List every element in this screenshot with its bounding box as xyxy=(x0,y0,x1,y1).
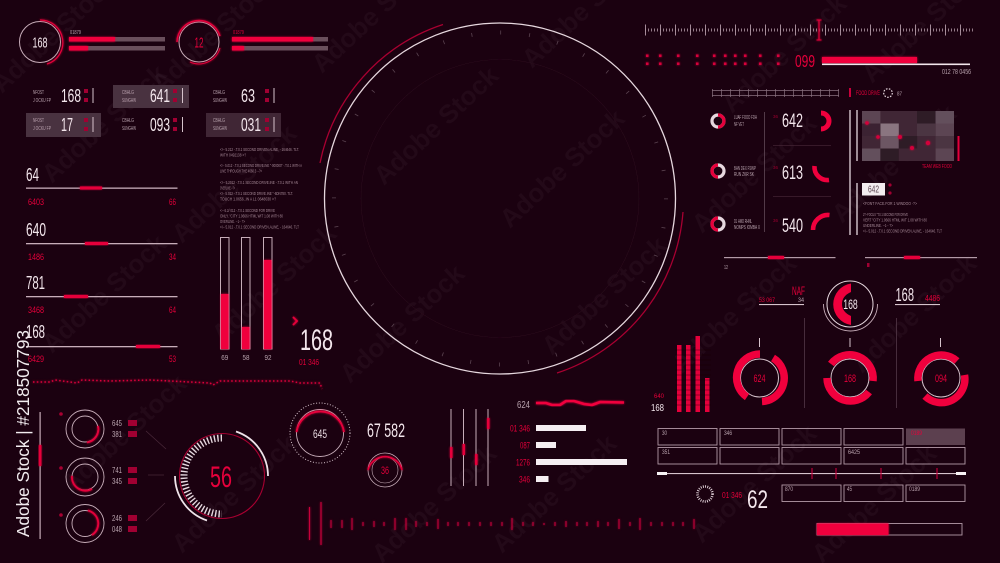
data table: 0189 xyxy=(911,431,923,437)
gauge: 36 xyxy=(368,453,402,487)
ring row 1: 381 xyxy=(112,430,122,439)
code text block: top: ONLY. "CITY 1.0666 HTML WIT 1.08 WITH 80 xyxy=(220,214,283,218)
data table: 30 xyxy=(662,431,667,437)
data table xyxy=(658,428,965,464)
stat row: 540: DJ HMD RHNL xyxy=(734,219,752,225)
stat: 093: CBHLG xyxy=(122,118,134,124)
slider: 781: 781 xyxy=(26,273,45,293)
ring row 1: 645 xyxy=(112,419,122,428)
gauge: 645: 645 xyxy=(313,427,327,441)
ring row 2 xyxy=(59,458,137,496)
stat: 63 xyxy=(213,85,274,106)
header: 168: 4486 xyxy=(925,294,940,303)
code text block: right: JT--FOCUS "T.0.1 SECOND FOR DRIVE xyxy=(863,212,908,217)
status label with spinner: FOOD DRIVE xyxy=(856,91,880,97)
stat: 031: CBHLG xyxy=(213,118,225,124)
progress bars: 01879 xyxy=(69,30,165,50)
sliders: right pair xyxy=(724,256,977,271)
watermark pattern: Adobe Stock xyxy=(206,218,343,349)
value: 099 with bar: 012 78 0456 xyxy=(942,69,971,76)
stat: 031 xyxy=(213,114,274,135)
slider: left xyxy=(724,256,836,271)
header: NAF: NAF xyxy=(792,284,805,298)
watermark pattern: Adobe Stock xyxy=(166,118,303,249)
gauge: 12: 12 xyxy=(194,34,204,52)
stat row: 540: 36 xyxy=(773,218,778,223)
stat: 168: 168 xyxy=(61,85,81,106)
value: 099 with bar xyxy=(795,51,971,76)
value: 099 with bar: 099 xyxy=(795,51,815,71)
watermark pattern: Adobe Stock xyxy=(666,248,803,379)
slider: 64 xyxy=(26,165,178,207)
stat row: 540: 540 xyxy=(782,216,803,237)
stat row: 613: 36 xyxy=(773,165,778,170)
gauge: 168 pie: 168 xyxy=(843,296,858,312)
watermark pattern: Adobe Stock xyxy=(36,58,173,189)
main circular scope xyxy=(320,23,683,374)
ring row 3: 048 xyxy=(112,525,122,534)
code text block: top: OVERLINE --?> xyxy=(220,186,235,190)
code text block: top: OVERLINE. --1-- ?> xyxy=(220,219,245,224)
code text block: right xyxy=(863,201,942,234)
slider: 640: 1486 xyxy=(28,252,44,262)
stat: 031: SUNGHW xyxy=(213,126,227,132)
level bars: 640 xyxy=(654,393,664,400)
short ticks xyxy=(760,338,940,347)
watermark pattern: Adobe Stock xyxy=(486,428,623,559)
data table: lower cells: 0189 xyxy=(909,487,921,493)
code text block: top: <!-- 5.2012 -.T.0.1 SECOND DRIVE.INE -.T.0.1 WITH AN xyxy=(220,180,298,185)
stat: 17 xyxy=(33,114,94,135)
stat row: 613: BAN DEX FSWP xyxy=(734,166,756,172)
data table: lower cells xyxy=(782,485,965,502)
divider xyxy=(763,112,766,232)
stat: 168: J OCKU FP xyxy=(33,98,51,104)
stat row: 642 xyxy=(712,111,829,132)
panel: right donut gauges xyxy=(737,281,965,408)
stat: 63: SUNGHW xyxy=(213,98,227,104)
donut: 168: 168 xyxy=(844,373,856,385)
row: 01 346: 01 346 xyxy=(510,424,530,434)
red caption: TEAM WEB FOOD xyxy=(922,164,952,170)
data table: lower cells: 870 xyxy=(785,487,794,493)
vertical rules xyxy=(850,110,857,235)
panel: right heat map xyxy=(850,110,960,235)
bar: 58: 58 xyxy=(242,353,250,362)
outer ring xyxy=(324,23,676,374)
horizontal bar chart xyxy=(510,400,627,484)
stat: 168: NFOST xyxy=(33,90,44,96)
code text block: top: <-- 6.2/ 012 -.T.0.1 SECOND FOR DRIVE xyxy=(220,208,275,213)
data table: 6425 xyxy=(848,450,861,456)
watermark pattern: Adobe Stock xyxy=(166,428,303,559)
red arc: lower right xyxy=(557,212,683,373)
panel: stat cells xyxy=(26,85,281,137)
slider: 781 xyxy=(26,273,178,315)
signal ticks: bottom centre xyxy=(310,502,694,545)
stat: 641: SUNGHW xyxy=(122,98,136,104)
code text block: right: UNDERLINE. --1-- ?> xyxy=(863,223,893,228)
slider: 64: 66 xyxy=(169,197,176,207)
ruler: secondary xyxy=(712,90,839,96)
level bars: 168 xyxy=(651,403,664,414)
value: 62 xyxy=(722,486,768,514)
header: 168 xyxy=(895,285,940,305)
vertical sliders xyxy=(450,409,490,486)
donut: 624 xyxy=(737,354,784,402)
gauge: 36: 36 xyxy=(381,465,389,477)
dotted red wave xyxy=(33,380,322,389)
code text block: top: <!-- 5.012 -.T.0.1 SECOND DRIVE.INE "-000000" -.T.0.1 WITH A xyxy=(220,163,303,168)
stat: 641: 641 xyxy=(150,85,170,106)
header: NAF xyxy=(759,284,805,305)
panel: small ring list xyxy=(59,410,166,542)
bar chart: vertical levels xyxy=(220,238,272,362)
callout: 168: 168 xyxy=(300,324,333,357)
separator xyxy=(773,195,831,198)
cell highlights xyxy=(26,85,281,137)
slider: 781: 3468 xyxy=(28,305,44,315)
table rule with markers xyxy=(657,468,966,479)
code text block: top: LINE THROUGH THE 4660.3 --?> xyxy=(220,168,262,174)
left vertical slider xyxy=(39,412,41,539)
ring row 2: 345 xyxy=(112,477,122,486)
watermark pattern: Adobe Stock xyxy=(36,228,173,359)
watermark pattern: Adobe Stock xyxy=(56,368,193,499)
gauge: 168: 168 xyxy=(32,34,48,52)
progress bars: red label: 01879 xyxy=(233,30,244,36)
stat: 641 xyxy=(122,85,183,106)
stat: 17: NFOST xyxy=(33,118,44,124)
value: 62: 62 xyxy=(747,486,768,514)
code text block: top: WITH 0492138 >? xyxy=(220,152,246,158)
tick ring xyxy=(334,32,666,364)
stat row: 613: RUN ZKR SK xyxy=(734,172,754,178)
code text block: right: <FONT FACE.FOR 1 WINDOO -?> xyxy=(863,201,917,206)
callout: 168 xyxy=(293,317,333,367)
code text block: top: <!-- 5.212 -.T.0.1 SECOND DRIVEN.ALINE, - 164646. TLT. xyxy=(220,147,299,152)
stat row: 540 xyxy=(712,215,830,237)
slider: 168: 6429 xyxy=(28,354,44,364)
row: 087: 087 xyxy=(520,440,530,450)
data table: lower cells: 45 xyxy=(847,487,852,493)
gauge: 168 pie xyxy=(824,281,878,331)
code text block: top: TOUCH 1.0656..IN A L1 0648030 >? xyxy=(220,196,276,202)
status label with spinner xyxy=(849,88,902,98)
stat row: 642: LUAF FOOD FDH xyxy=(734,115,757,121)
donut: 624: 624 xyxy=(754,373,766,385)
callout: 168: 01 346 xyxy=(299,357,319,367)
progress bars: red label xyxy=(232,30,328,50)
slider: 640: 34 xyxy=(169,252,176,262)
gauge: 56 xyxy=(175,432,268,520)
slider: 168: 168 xyxy=(26,322,45,342)
slider: 64: 6403 xyxy=(28,197,44,207)
slider: left: 12 xyxy=(724,265,728,271)
value: 67 582: 67 582 xyxy=(367,420,405,442)
stat: 63: CBHLG xyxy=(213,90,225,96)
code text block: top: <!-- 5.012 -.T.0.1 SECOND DRIVE.INE "-6DN780. TLT. xyxy=(220,191,293,196)
ruler: top right xyxy=(645,20,974,40)
donut: 094: 094 xyxy=(935,373,947,385)
progress bars: 01879: 01879 xyxy=(70,30,81,36)
progress bar: bottom right xyxy=(817,524,962,535)
panel: left sliders xyxy=(26,165,178,364)
panel: top-left gauges xyxy=(20,20,328,64)
ring row 1 xyxy=(59,410,137,448)
stat: 031: 031 xyxy=(241,114,261,135)
gauge: 12 xyxy=(177,21,220,64)
code text block: top: <!-- 5.012 -.T.0.1 SECOND DRIVEN.ALINE, - 164646. TLT xyxy=(220,224,299,230)
red dot pairs xyxy=(646,54,780,65)
stat: 641: CBHLG xyxy=(122,90,134,96)
slider: right xyxy=(865,256,977,267)
code text block: right: <!-- 5.012 -.T.0.1 SECOND DRIVEN.ALINE, - 164646. TLT xyxy=(863,228,942,234)
connector lines xyxy=(146,431,166,521)
gauge: 56: 56 xyxy=(210,461,232,494)
header: NAF: 53 067 xyxy=(759,297,775,304)
slider: 168: 53 xyxy=(169,354,176,364)
watermark pattern: Adobe Stock xyxy=(368,60,505,191)
donut: 094 xyxy=(918,355,965,403)
red marker xyxy=(958,136,960,161)
value box: 642: 642 xyxy=(868,184,879,196)
stat: 093: 093 xyxy=(150,114,170,135)
slider: 64: 64 xyxy=(26,165,39,185)
slider: 640: 640 xyxy=(26,220,46,240)
stat: 17: J OCKU FP xyxy=(33,126,51,132)
watermark pattern: Adobe Stock xyxy=(536,230,673,361)
header: 168: 168 xyxy=(896,285,914,305)
row: 346: 346 xyxy=(519,474,530,484)
watermark pattern: Adobe Stock xyxy=(686,418,823,549)
watermark pattern: Adobe Stock xyxy=(334,258,471,389)
data table: 351 xyxy=(662,450,671,456)
row: 624: 624 xyxy=(517,400,530,411)
watermark pattern: Adobe Stock xyxy=(494,103,631,234)
stat: 168 xyxy=(33,85,94,106)
stat: 093 xyxy=(122,114,183,135)
watermark pattern: Adobe Stock xyxy=(826,98,963,229)
watermark pattern: Adobe Stock xyxy=(686,108,823,239)
donut: 168 xyxy=(827,355,873,401)
stat: 17: 17 xyxy=(61,114,73,135)
stat row: 642: NF VET xyxy=(734,122,744,128)
header: NAF: 34 xyxy=(798,297,804,304)
stat: 093: SUNGHW xyxy=(122,126,136,132)
heat map blocks xyxy=(862,111,954,161)
stat row: 642: 642 xyxy=(782,111,803,132)
gauge: 168 xyxy=(20,20,63,64)
stat row: 642: 36 xyxy=(773,114,778,119)
stat row: 613 xyxy=(712,163,829,184)
gauge: 645 xyxy=(290,403,350,463)
bar: 69: 69 xyxy=(221,353,228,362)
status label with spinner: 87 xyxy=(897,92,902,98)
row: 1276: 1276 xyxy=(516,458,530,468)
inner faint ring xyxy=(361,60,639,338)
level bars xyxy=(651,336,711,414)
stat row: 540: NOMPS IOMBA X xyxy=(734,225,760,231)
data table: 346 xyxy=(724,431,733,437)
slider: 168 xyxy=(26,322,178,364)
ring row 2: 741 xyxy=(112,466,122,475)
red arc: upper left xyxy=(320,24,443,163)
ring row 3: 246 xyxy=(112,514,122,523)
slider: 781: 64 xyxy=(169,305,176,315)
watermark id: side: Adobe Stock | #218507793 xyxy=(13,330,33,537)
dividers xyxy=(804,318,896,408)
spinner xyxy=(698,486,712,502)
code text block: top xyxy=(220,147,303,230)
stat row: 613: 613 xyxy=(782,163,803,184)
watermark pattern: Adobe Stock xyxy=(846,248,983,379)
slider: 640 xyxy=(26,220,178,262)
code text block: right: VERT "CITY 1.0666 HTML WIT 1.08 WITH 80 xyxy=(863,218,927,222)
separator xyxy=(773,144,831,147)
bar: 92: 92 xyxy=(264,353,272,362)
value: 62: 01 346 xyxy=(722,490,742,500)
ring row 3 xyxy=(59,504,137,542)
panel: right stats xyxy=(712,111,831,237)
stat: 63: 63 xyxy=(241,85,255,106)
